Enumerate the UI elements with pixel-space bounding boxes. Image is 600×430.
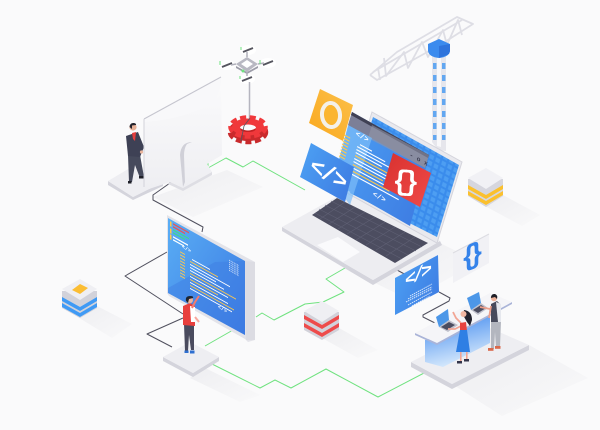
cube stack: yellow [468, 168, 503, 207]
crane head [428, 39, 450, 58]
floor shadows [76, 170, 588, 416]
large code screen [167, 215, 255, 342]
floating card: code tag: </> [307, 154, 350, 198]
code window: </> [355, 131, 369, 145]
laptop [282, 112, 462, 285]
gear [230, 118, 266, 142]
code window: </> [372, 191, 387, 205]
monitor back [144, 77, 222, 191]
drone cable [248, 82, 250, 118]
drone [219, 45, 276, 84]
floating card: code with text lines: </> [405, 258, 432, 293]
man with laptop [480, 294, 501, 351]
cube stack: blue [62, 279, 97, 318]
businessman [126, 123, 144, 184]
laptop screen [347, 112, 462, 243]
trackpad [317, 237, 360, 262]
platform: team desk [411, 325, 529, 389]
platform: developer [163, 342, 219, 377]
developer at screen [183, 296, 199, 354]
floating card: braces [453, 234, 489, 283]
floating card: red braces [383, 153, 431, 207]
connector: dark cables [125, 149, 450, 347]
keyboard [312, 198, 428, 263]
laptop: right on desk [467, 292, 488, 315]
crane [370, 17, 473, 151]
woman with laptop [448, 310, 472, 364]
laptop: left on desk [436, 309, 458, 332]
cube stack: red [304, 301, 339, 340]
floating card: code tag [300, 143, 354, 202]
code window [333, 112, 429, 226]
code window: - o x [409, 152, 428, 168]
platform: businessman [108, 165, 163, 200]
connector: green network lines [205, 130, 426, 397]
crane jib [370, 17, 473, 80]
floating card: code with text lines [395, 255, 439, 315]
large code screen: </> [218, 304, 227, 315]
floating card: orange ring [309, 89, 353, 141]
crane mast [432, 56, 446, 151]
floating card: red braces: {} [392, 167, 420, 200]
team desk [415, 293, 512, 367]
laptop base [282, 227, 442, 285]
large code screen: </> [182, 244, 191, 255]
floating card: braces: {} [461, 236, 484, 277]
